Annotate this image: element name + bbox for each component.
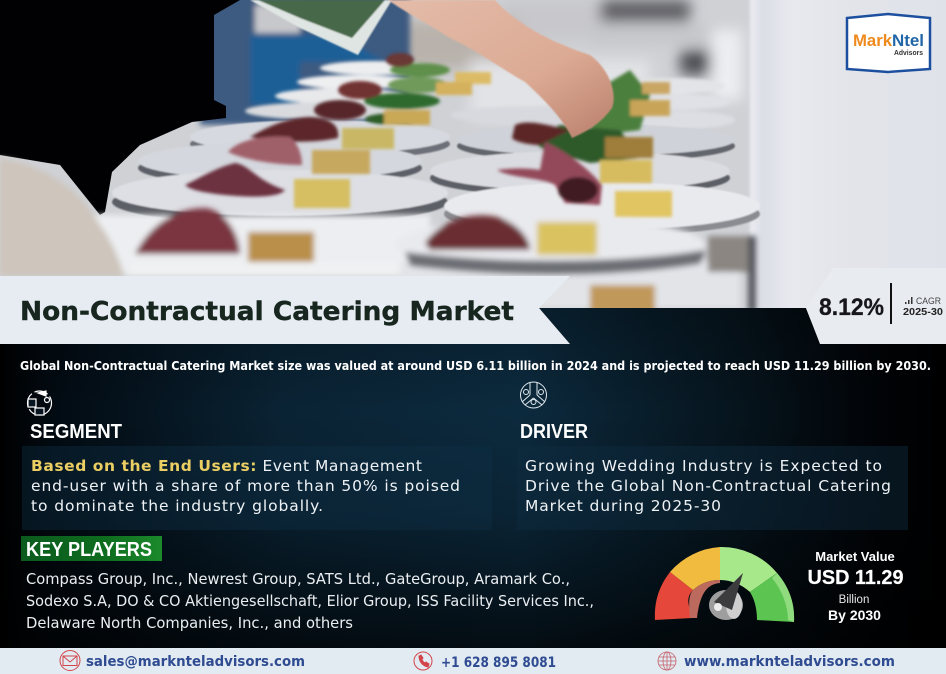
gauge light green sector — [720, 547, 777, 592]
icon: globe — [658, 652, 676, 670]
phone: +1 628 895 8081 — [441, 655, 556, 671]
salad greens and far food — [185, 53, 672, 217]
key players list: Compass Group, Inc., Newrest Group, SATS Ltd., GateGroup, Aramark Co., — [26, 570, 570, 588]
title banner — [0, 276, 570, 344]
key players list: Sodexo S.A, DO & CO Aktiengesellschaft, Elior Group, ISS Facility Services Inc., — [26, 592, 594, 610]
heading: segment: SEGMENT — [30, 421, 122, 443]
gauge highlight — [772, 573, 794, 622]
segment text: to dominate the industry globally. — [31, 497, 323, 515]
segment text — [31, 457, 460, 515]
CAGR badge — [806, 268, 946, 344]
gauge yellow sector — [670, 547, 720, 590]
CAGR badge: 2025-30 — [903, 306, 943, 318]
gauge hub — [709, 590, 743, 620]
icon: segment — [28, 391, 52, 415]
icon: email — [60, 650, 80, 670]
photo: chef plating dishes — [0, 0, 946, 320]
panel: segment — [22, 391, 492, 530]
dark background panel — [0, 308, 946, 648]
arm and hand — [388, 0, 614, 138]
website: www.marknteladvisors.com — [684, 654, 895, 670]
key players badge — [21, 536, 162, 561]
key players heading: KEY PLAYERS — [26, 539, 152, 561]
market value text: USD 11.29 — [808, 566, 904, 589]
left row plates — [112, 120, 450, 224]
right row plates — [430, 124, 760, 236]
driver box — [517, 446, 908, 530]
segment text: Based on the End Users: Event Management — [31, 457, 422, 475]
market value text: Market Value — [815, 549, 895, 564]
logo: MarkNtel Advisors: Ntel — [892, 31, 924, 50]
gauge needle — [714, 573, 743, 610]
logo: MarkNtel Advisors: Mark — [853, 31, 893, 50]
background plates — [245, 61, 735, 129]
CAGR badge: CAGR — [916, 296, 941, 307]
driver text: Market during 2025-30 — [525, 497, 721, 515]
market value text: Billion — [839, 594, 869, 606]
logo: MarkNtel Advisors — [847, 14, 930, 72]
salad bag — [250, 0, 392, 55]
gauge red sector — [655, 572, 693, 620]
gauge green sector — [750, 573, 794, 622]
icon: driver — [520, 382, 546, 408]
segment text: end-user with a share of more than 50% is poised — [31, 477, 460, 495]
gauge inner shade — [689, 580, 720, 618]
heading: driver: DRIVER — [520, 421, 588, 443]
gauge chart — [655, 547, 794, 622]
CAGR badge: 8.12% — [819, 294, 884, 321]
logo: MarkNtel Advisors: Advisors — [894, 50, 923, 57]
footer contact bar — [0, 648, 946, 674]
driver text: Growing Wedding Industry is Expected to — [525, 457, 882, 475]
segment box — [22, 446, 492, 530]
icon: phone — [414, 652, 432, 670]
driver text — [525, 457, 891, 515]
panel: driver — [517, 382, 908, 530]
email: sales@marknteladvisors.com — [86, 654, 305, 670]
key players list — [26, 570, 594, 632]
key players list: Delaware North Companies, Inc., and others — [26, 614, 353, 632]
front plates — [0, 158, 756, 313]
market value text: By 2030 — [828, 607, 881, 623]
market value text — [808, 549, 904, 623]
title banner: Non-Contractual Catering Market — [20, 297, 514, 327]
gauge hub centre — [714, 603, 722, 611]
driver text: Drive the Global Non-Contractual Catering — [525, 477, 891, 495]
panel: key players — [21, 536, 594, 632]
